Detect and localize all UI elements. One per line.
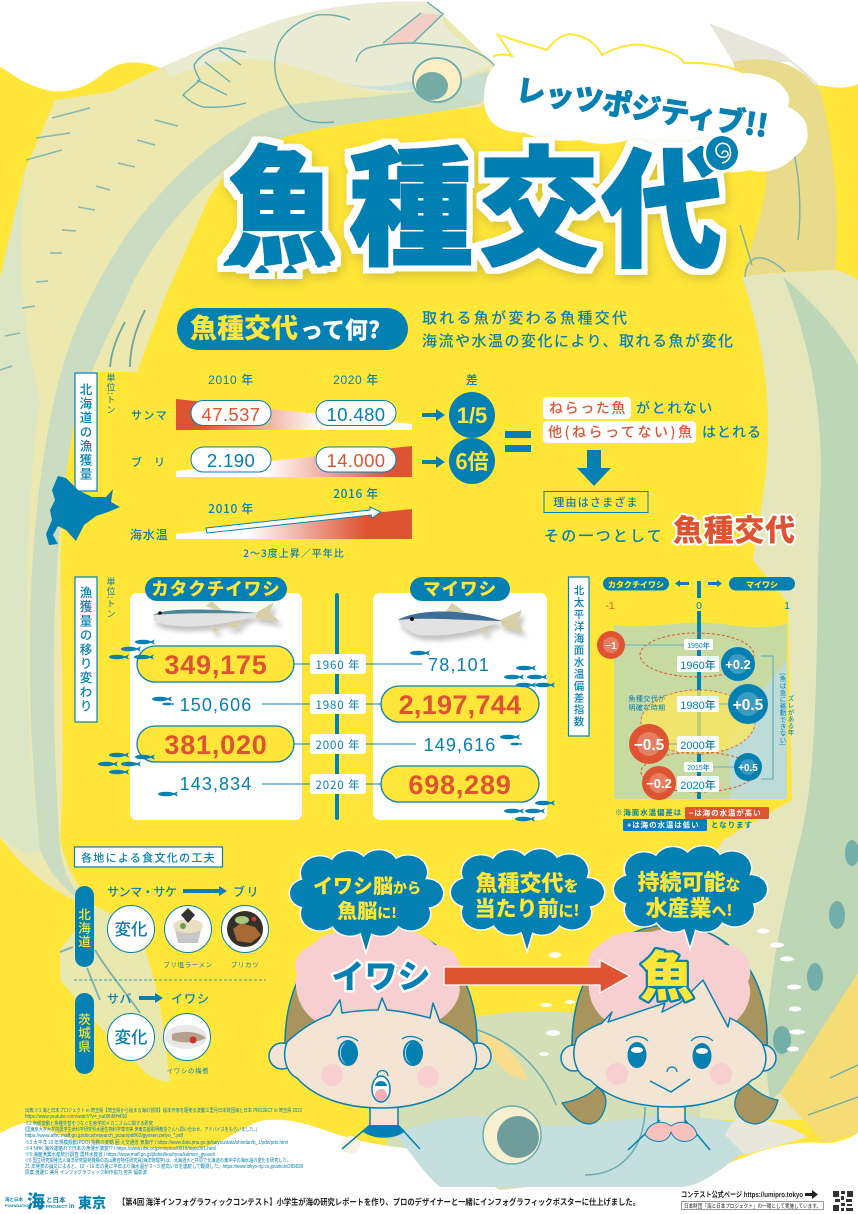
region: 茨城県 [75,990,210,1075]
references: ※4 NHK 海外連絡れで日本の漁港が激変!? / https://www.nhk.or.jp/minplus/0019/topic091.html [25,1145,216,1152]
eyes [628,1042,646,1068]
references: (国東京大学大学院農学生命科学研究科水圏生物科学専攻等 伊東高屋助明教授さんへ問い合わせ、アドバイスをもらいました。) [25,1126,257,1133]
note [615,807,769,831]
background: white top wave [0,0,858,91]
face [285,998,476,1108]
references: https://www.youtube.com/watch?v=_nu00hMH4S0 [25,1114,127,1120]
message: ねらった魚 [543,397,714,419]
chart: sea temperature index: 1950年 [687,641,710,650]
row: サンマ: 10.480 [327,404,385,425]
head [164,2,490,92]
illustration: anchovy [153,601,280,632]
chart: sea temperature index: 2020年 [680,778,716,792]
brain [588,928,750,1029]
axis header: マイワシ [746,580,778,590]
icon: fish feet of 魚 [224,257,330,272]
timeline axis [335,593,339,820]
label: 漁獲量の移り変わり: 漁獲量の移り変わり [76,585,96,714]
references: 出典:※1 海と日本プロジェクト in 埼玉県【埼玉県から始まる海の冒険】絵本作家を駆使る波動江里月日本財団海と日本 PROJECT in 埼玉県 2022 [25,1107,302,1114]
big arrow [444,960,630,993]
footer logo: in [69,1204,75,1210]
speech bubble 1: イワシ脳から [313,870,421,899]
axis header: -1 [605,600,615,612]
heading pill: 魚種交代って何?: 魚種交代 [190,307,298,346]
table years: 2010 年 [208,373,254,387]
chart: sea temperature index: 魚種交代が [628,694,666,704]
background: fish fin lower left [60,905,170,1082]
footer logo: 東京 [78,1195,106,1211]
values [164,650,521,800]
panel: マイワシ: マイワシ [423,576,497,601]
speech cloud background: レッツポジティブ [484,34,808,172]
row: サンマ: サンマ [131,407,168,423]
row: ブリ: 14.000 [327,450,385,471]
bubbles: −0.2 [646,776,672,791]
values: 143,834 [180,774,252,794]
region: 北海道: サンマ・サケ [107,883,177,900]
label: 北太平洋海面水温偏差指数 [568,577,589,736]
neck and ears [561,980,776,1130]
arrow: down [577,450,611,486]
equals sign [505,431,531,452]
values: 381,020 [164,730,268,760]
panel: マイワシ [373,576,547,820]
region: 茨城県: 変化 [114,1024,148,1048]
speech bubble 3: 持続可能な [637,865,741,897]
values: 150,606 [180,695,252,715]
connecting lines [262,664,422,784]
region: 北海道: ブリ [233,883,260,900]
value pills [137,646,539,802]
references: ※2 気候変動と魚種交替をつなぐ生態学的メカニズムに関する研究 [25,1120,153,1127]
year chips [310,654,366,794]
values: 698,289 [408,770,512,800]
speech bubble 3 [614,846,767,947]
cloud text: レッツポジティブ: レッツポジティブ!! [514,65,771,146]
values: 149,616 [424,735,496,755]
footer logo: FOUNDATION [5,1203,31,1208]
message: 他の魚: はとれる [702,422,762,442]
speech bubble 2: 魚種交代を [475,866,579,898]
period highlight [641,690,755,754]
row: サンマ [131,399,412,430]
chart: sea temperature index: 1960年 [680,658,716,672]
message: 他の魚 [543,421,762,443]
intro text [422,309,733,350]
title: 魚種交代 [224,139,722,284]
bubbles: +0.5 [733,697,764,714]
intro text: 海流や水温の変化により、取れる魚が変化 [422,332,733,350]
brain label: イワシ: イワシ [332,950,430,998]
table years: 差 [466,373,478,387]
label: 北海道の漁獲量: 北海道の漁獲量 [76,383,96,482]
table years: 2020 年 [333,373,379,387]
bubbles [597,631,768,800]
row: サンマ: 47.537 [202,404,260,425]
eyes [338,1040,358,1066]
contest page link: 日本財団「海と日本プロジェクト」の一環として実施しています。 [684,1202,821,1210]
bubbles: −0.5 [634,737,665,754]
footer logo: 海 [27,1191,45,1212]
speech bubble 2: 当たり前に! [475,893,579,923]
footer statement: 【第4回 海洋インフォグラフィックコンテスト】小学生が海の研究レポートを作り、プロのデザイナーと一緒にインフォグラフィックポスターに仕上げました。 [118,1196,640,1208]
note: −は海の水温が高い [689,808,761,818]
axis header [603,577,795,612]
axis header: 0 [696,600,702,612]
footer logo [5,1191,106,1212]
scale marks [0,108,178,370]
message: 他の魚: 他(ねらってない)魚 [548,422,692,442]
axis header: カタクチイワシ [608,580,664,590]
year chips: 2020 年 [315,777,361,793]
contest page link: コンテスト公式ページ https://umipro.tokyo [681,1189,803,1199]
footer logo: PROJECT [46,1204,68,1209]
region: 北海道: 変化 [114,916,148,940]
background: white foreground at bottom [0,1120,858,1214]
speech bubble 3: 水産業へ! [646,891,732,923]
conclusion [544,506,795,550]
bubbles: +0.5 [738,763,758,774]
title: 魚種交代: 交 [479,139,599,282]
table years [208,373,478,387]
chart: sea temperature index: (魚は急に移動できない) [778,673,788,746]
label: 北太平洋海面水温偏差指数: 北太平洋海面水温偏差指数 [572,585,586,728]
row: 海水温: 海水温 [130,526,168,543]
region: 北海道 [75,883,268,969]
note: ※海面水温偏差は [615,807,682,817]
heading pill: 魚種交代って何?: って何? [300,311,380,345]
illustration: sardine [398,603,523,637]
child right [561,925,778,1150]
year chips: 1960 年 [315,657,361,673]
background: fish body right [560,23,858,1143]
brain [295,928,460,1028]
year chips: 2000 年 [315,737,361,753]
row: 海水温: 2016 年 [333,485,379,502]
contest page link [681,1189,824,1210]
intro text: 取れる魚が変わる魚種交代 [422,309,627,327]
note: となります [711,820,753,830]
result: 6倍: 6倍 [455,446,489,476]
result: 6倍 [449,438,495,484]
region: 茨城県: イワシの梅煮 [167,1065,209,1075]
message: ねらった魚: ねらった魚 [549,398,627,418]
title: 魚種交代: 代 [602,141,722,284]
conclusion: 魚種交代 [673,506,795,550]
row: 海水温: 2010 年 [208,500,254,517]
values: 349,175 [164,650,268,680]
note: +は海の水温は低い [627,820,699,830]
unit label: 単位:トン [104,372,118,415]
unit label: 単位:トン [104,576,118,619]
panel: カタクチイワシ [130,576,302,820]
year tags [677,639,719,792]
background: large fish body left [0,2,500,905]
region: 茨城県: 茨城県 [75,1012,94,1054]
chart: sea temperature index [597,577,796,800]
speech bubble 1 [290,850,443,951]
values: 78,101 [428,655,490,675]
title: 魚種交代: 魚 [228,139,336,282]
food: ブリ塩ラーメン [164,906,212,952]
message: ねらった魚: がとれない [636,398,714,418]
background: blue water at bottom [342,1106,807,1187]
references: 21 年発表の論文によると、10 ~ 16 年の夏に平年より海水温が 2 ~ 3 度高い日を連続して観測した。https://www.tokyo-np.co.jp/article/289828 [25,1163,303,1170]
icon: spiral [703,133,741,173]
row: ブリ [131,446,412,477]
references [25,1107,303,1176]
references: ※3 太平洋 10 年規模振動(PDO) 指数の変動 囲 え交通省 気象庁 / https://www.data.jma.go.jp/kaiyou/data/shindan/b_1/pdo/pdo.html [25,1139,288,1146]
chart: sea temperature index: 2015年 [687,763,710,772]
heading pill: 魚種交代って何? [177,307,408,350]
conclusion: その一つとして [544,525,664,546]
year chips: 1980 年 [315,697,361,713]
row: 海水温: 2～3度上昇／平年比 [243,545,345,560]
references: ※6 国立研究開発法人海洋研究開発機構の高山勝吉特任研究員(海洋物理学)は、北海道大と共同で北海道の東沖中の海水温の変化を研究した。 [25,1157,291,1164]
footer logo: と日本 [46,1195,66,1204]
QR code [833,1191,853,1211]
row: 海水温 [130,485,412,560]
panel: カタクチイワシ: カタクチイワシ [151,576,281,601]
region: 北海道: ブリカツ [231,959,259,969]
child left [269,928,491,1149]
row: ブリ: 2.190 [207,450,255,471]
axis header: 1 [784,600,790,612]
footer logo: 海と日本 [5,1196,23,1203]
region: 茨城県: サバ [107,990,133,1007]
chart: sea temperature index: 2000年 [680,738,716,752]
region: 茨城県: イワシ [171,990,210,1007]
background: lower centre fish [386,1011,700,1214]
bubbles: +0.2 [725,657,751,672]
brain label: 魚: 魚 [640,933,694,1012]
white petals near centre [539,952,575,1056]
face [574,980,766,1107]
values: 2,197,744 [399,690,521,720]
region: 北海道: ブリ塩ラーメン [163,959,213,969]
title: 魚種交代: 種 [349,139,473,282]
neck and collar [269,998,491,1133]
label: 各地による食文化の工夫: 各地による食文化の工夫 [81,850,216,866]
speech bubble 2 [451,849,604,950]
dots [773,840,858,1054]
tag: 理由はさまざま: 理由はさまざま [553,494,639,510]
bubbles: −1 [605,641,617,652]
speech bubble 1: 魚脳に! [337,895,397,924]
tag: 理由はさまざま [544,492,648,512]
background: fish eye top [413,58,461,102]
references: 原案:渡邊仁 美月 インフォグラフィック制作協力:苦井 偏彰波 [25,1169,147,1176]
pigtails [562,1087,606,1124]
references: https://www.affrc.maff.go.jp/docs/research_pclan/pdf/62/gyosen.pelyo_*.pdf [25,1133,184,1139]
chart: sea temperature index: 1980年 [680,698,716,712]
small fish school [98,639,555,822]
region: 北海道: 北海道 [75,908,94,949]
arrows to result [422,409,445,468]
result: 1/5 [449,392,495,438]
row: ブリ: ブリ [131,454,177,470]
icon: Hokkaido map [46,476,120,545]
chart: sea temperature index: 明確な時期 [628,703,666,713]
food: イワシの梅煮 [164,1014,210,1060]
chart: sea temperature index: ズレがある年 [786,694,796,737]
references: ※5 海面漁業水産統計調査 農林水産省 / https://www.maff.go.jp/j/tokei/kouhyou/kaimen_gyosei/ [25,1151,216,1158]
result: 1/5: 1/5 [457,403,487,428]
food: ブリカツ [222,906,268,952]
